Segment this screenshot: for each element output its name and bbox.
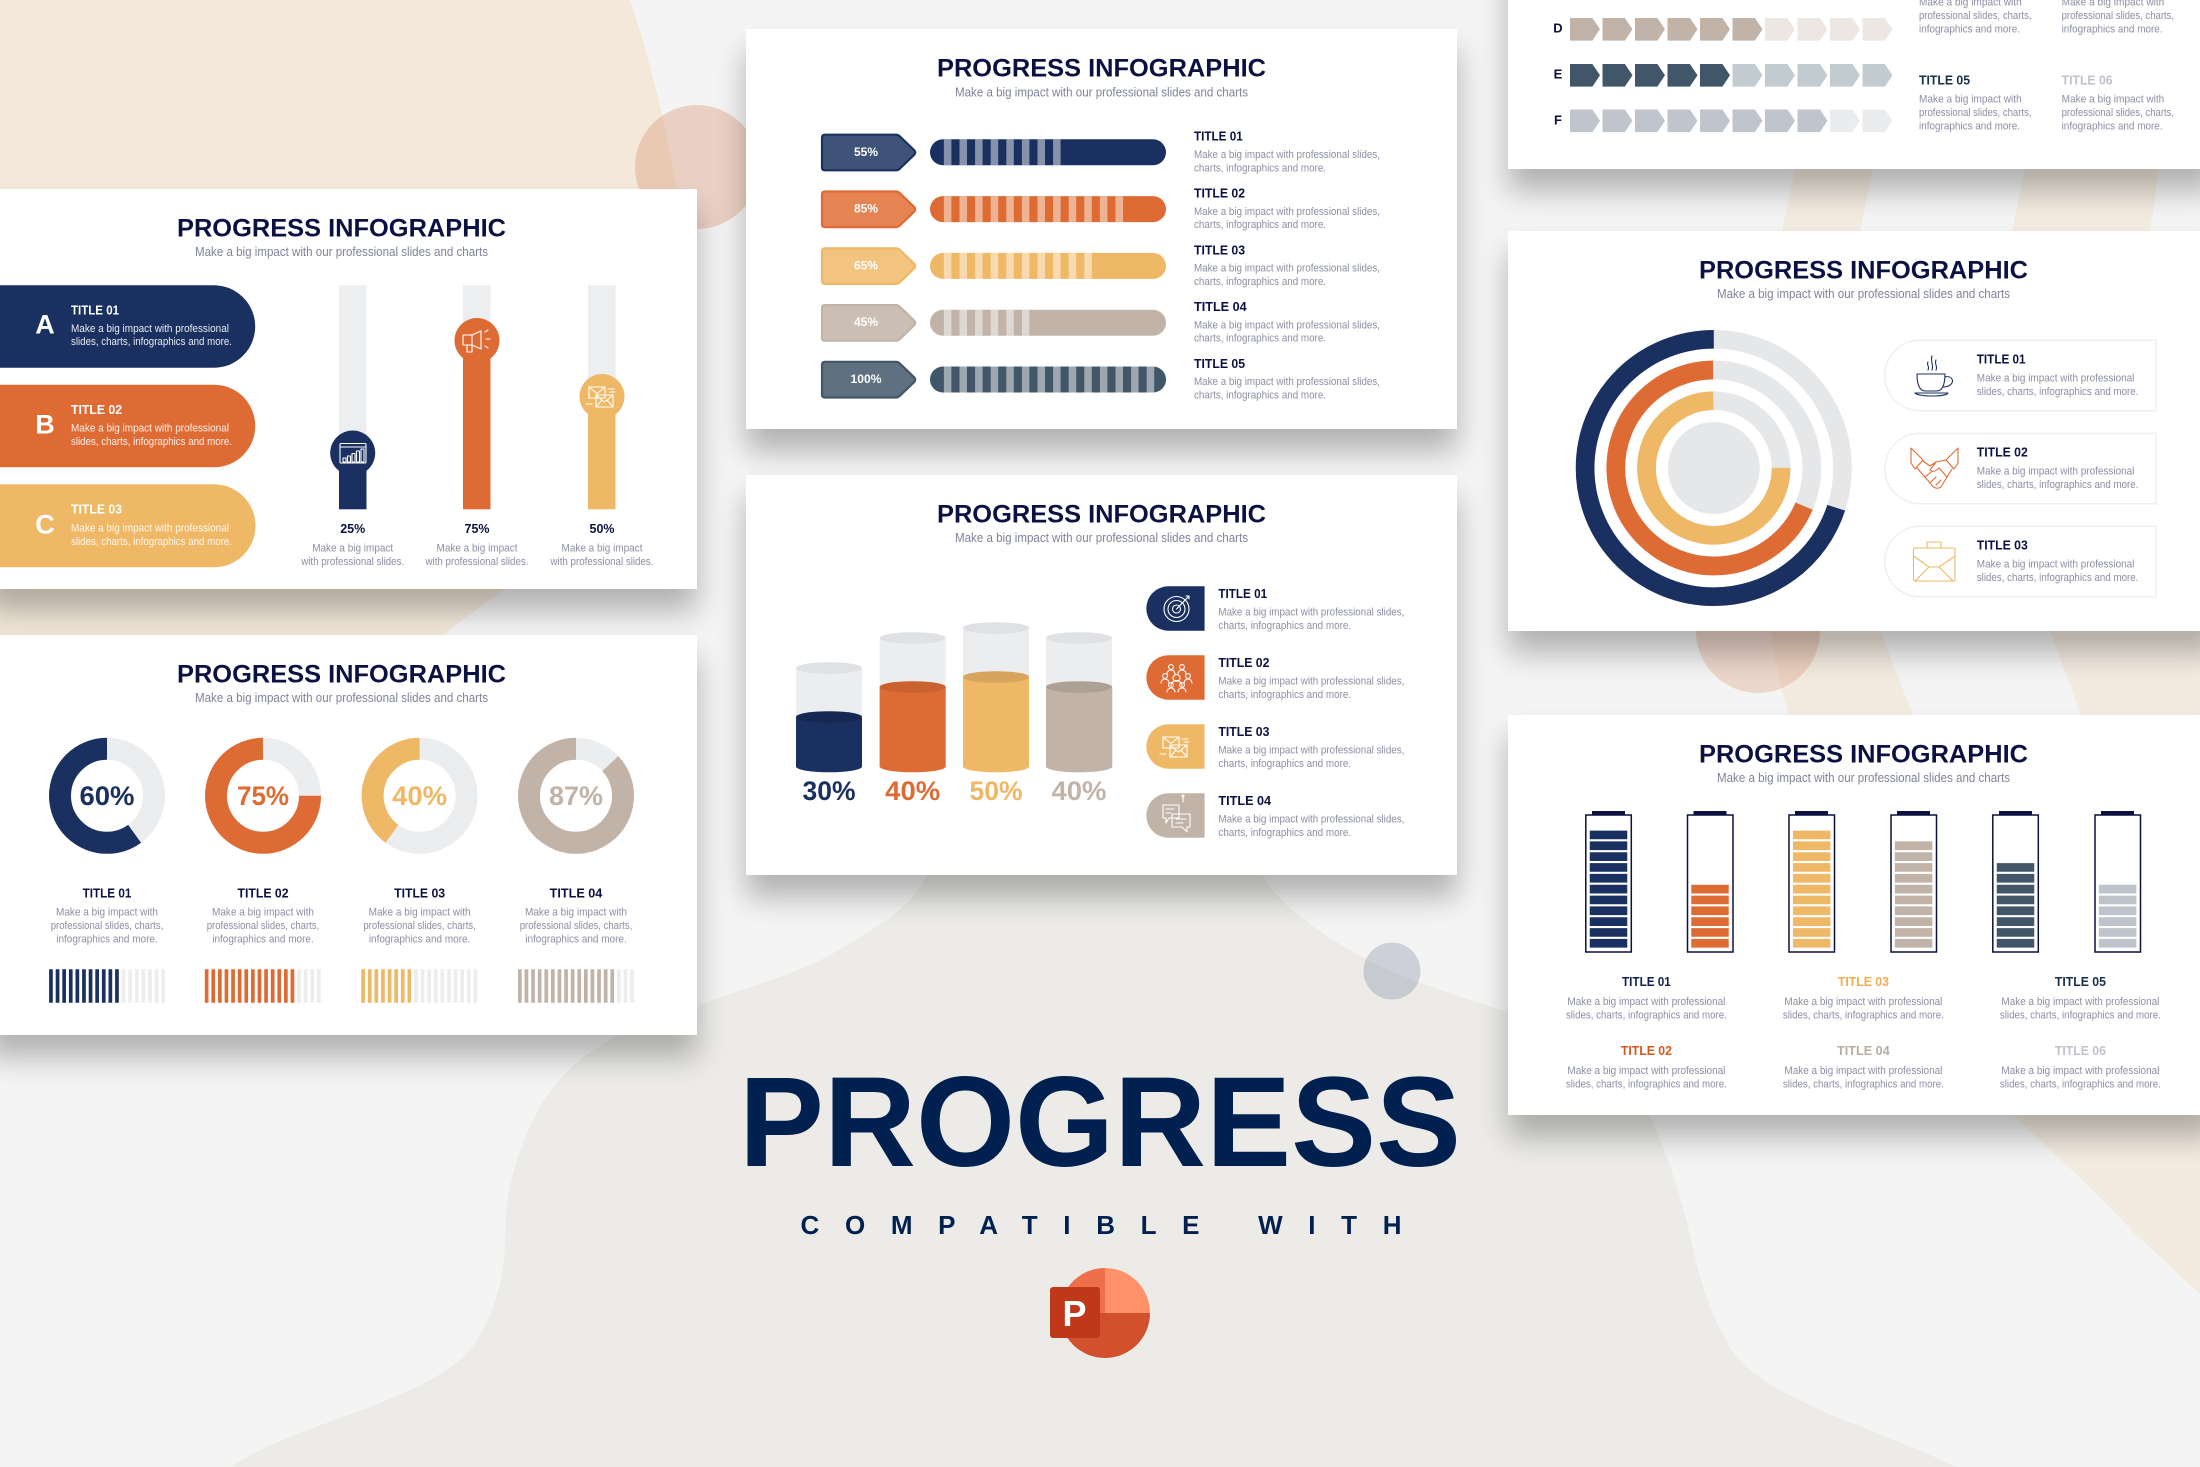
- box: title 02: Make a big impact with professional: [1977, 466, 2134, 478]
- pill A: slides, charts, infographics and more.: [71, 336, 232, 348]
- panel: concentric rings: [1508, 231, 2200, 631]
- subheading: Make a big impact with our professional slides and charts: [195, 244, 488, 259]
- text: title 06: infographics and more.: [2062, 120, 2163, 132]
- donut 40%: 40%: [392, 781, 447, 811]
- text: title 05: TITLE 05: [2055, 975, 2106, 989]
- text: title 02: Make a big impact with professional: [1567, 1065, 1725, 1077]
- pill B: Make a big impact with professional: [71, 423, 229, 435]
- row 65%: Make a big impact with professional slides,: [1194, 263, 1380, 275]
- background: grey corner right: [2150, 130, 2200, 500]
- stripe meter 1: [49, 969, 165, 1003]
- vertical bar 75%: Make a big impact: [436, 543, 518, 555]
- text: title 04: Make a big impact with: [525, 907, 627, 919]
- panel: pills and vertical bars: [0, 189, 697, 589]
- cylinder 30%: 30%: [802, 776, 856, 806]
- stripe meter 3: [361, 969, 477, 1003]
- row 65%: TITLE 03: [1194, 243, 1245, 257]
- row 85%: TITLE 02: [1194, 186, 1245, 200]
- row 55%: [822, 130, 1380, 174]
- donut 60%: 60%: [80, 781, 134, 811]
- text: title 03: infographics and more.: [369, 933, 470, 945]
- row F: [1554, 110, 1892, 132]
- subheading: COMPATIBLE WITH: [800, 1210, 1402, 1240]
- vertical bar 50%: Make a big impact: [562, 543, 642, 555]
- battery 6: [2095, 811, 2140, 952]
- battery 2: [1688, 811, 1733, 952]
- row F: F: [1554, 112, 1562, 128]
- text: title 04: slides, charts, infographics and more.: [1783, 1078, 1944, 1090]
- pill A: A: [35, 310, 55, 340]
- row: title 02 people: charts, infographics and more.: [1218, 689, 1351, 701]
- vertical bar 75%: [425, 285, 528, 568]
- text: title 03: slides, charts, infographics and more.: [1783, 1009, 1944, 1021]
- text: title 02: slides, charts, infographics and more.: [1566, 1078, 1727, 1090]
- subheading: Make a big impact with our professional slides and charts: [195, 690, 488, 705]
- text: title 03: TITLE 03: [394, 886, 445, 900]
- cylinder 40% tan: [1046, 632, 1112, 806]
- text: title 01: [51, 886, 163, 945]
- box: title 01: Make a big impact with professional: [1977, 373, 2134, 385]
- cylinder 40% orange: [880, 632, 946, 806]
- heading: PROGRESS INFOGRAPHIC: [937, 501, 1266, 529]
- text: cropped column 1: professional slides, charts,: [1919, 10, 2032, 22]
- battery 5: [1993, 811, 2038, 952]
- text: title 01: infographics and more.: [56, 933, 158, 945]
- row: title 02 people: Make a big impact with professional slides,: [1218, 676, 1404, 688]
- row: title 04 chat: [1146, 793, 1404, 839]
- row 85%: [822, 186, 1380, 231]
- row: title 03 mail: Make a big impact with professional slides,: [1218, 745, 1404, 757]
- text: title 06: TITLE 06: [2055, 1044, 2106, 1058]
- text: title 05: infographics and more.: [1919, 120, 2020, 132]
- text: title 05: TITLE 05: [1919, 73, 1970, 87]
- text: title 05: Make a big impact with: [1919, 94, 2022, 106]
- subheading: Make a big impact with our professional slides and charts: [1717, 286, 2010, 301]
- row: title 03 mail: TITLE 03: [1218, 725, 1269, 739]
- stripe meter 2: [205, 969, 321, 1003]
- row: title 01 target: [1146, 586, 1404, 632]
- donut 75%: 75%: [237, 781, 289, 811]
- text: title 02: TITLE 02: [238, 886, 289, 900]
- text: title 06: TITLE 06: [2062, 73, 2113, 87]
- text: title 01: Make a big impact with professional: [1567, 996, 1725, 1008]
- text: cropped column 2: professional slides, charts,: [2062, 10, 2174, 22]
- text: cropped column 2: [2062, 0, 2174, 35]
- row 45%: [822, 300, 1380, 345]
- battery 3: [1789, 811, 1834, 952]
- text: title 05: slides, charts, infographics and more.: [2000, 1009, 2161, 1021]
- pill A: TITLE 01: [71, 303, 119, 317]
- background: grey gaps between right bands: [1860, 130, 2120, 1000]
- vertical bar 75%: 75%: [464, 522, 490, 536]
- row 45%: 45%: [854, 315, 878, 329]
- text: title 05: Make a big impact with professional: [2001, 996, 2159, 1008]
- panel: chevron rows (cropped at top): [1508, 0, 2200, 169]
- pill C: [0, 484, 256, 567]
- battery 4: [1891, 811, 1936, 952]
- box: title 03: Make a big impact with professional: [1977, 559, 2134, 571]
- row: title 03 mail: [1146, 724, 1404, 770]
- vertical bar 50%: [550, 285, 654, 568]
- vertical bar 50%: with professional slides.: [550, 556, 654, 568]
- vertical bar 75%: with professional slides.: [425, 556, 528, 568]
- pill B: B: [35, 409, 55, 439]
- subheading: Make a big impact with our professional slides and charts: [955, 84, 1248, 99]
- heading: PROGRESS INFOGRAPHIC: [1699, 257, 2028, 285]
- pill A: [0, 285, 255, 368]
- vertical bar 25%: 25%: [340, 522, 365, 536]
- box: title 03: slides, charts, infographics and more.: [1977, 572, 2138, 584]
- text: title 01: TITLE 01: [83, 886, 131, 900]
- row 85%: 85%: [854, 202, 878, 216]
- icon: PowerPoint logo: P: [1062, 1293, 1087, 1334]
- row 85%: charts, infographics and more.: [1194, 219, 1326, 231]
- row: title 04 chat: charts, infographics and more.: [1218, 827, 1351, 839]
- row 65%: [822, 243, 1380, 288]
- decorative circle top: [635, 105, 759, 229]
- row 100%: charts, infographics and more.: [1194, 390, 1326, 402]
- pill B: TITLE 02: [71, 403, 122, 417]
- donut 60%: [60, 749, 154, 843]
- pill B: slides, charts, infographics and more.: [71, 436, 232, 448]
- text: title 03: [1783, 975, 1944, 1021]
- cylinder 40% orange: 40%: [885, 776, 940, 806]
- vertical bar 25%: [300, 285, 404, 568]
- text: title 06: [2062, 73, 2174, 132]
- text: title 02: [207, 886, 319, 945]
- text: title 03: Make a big impact with professional: [1784, 996, 1942, 1008]
- decorative circle ring card: [1696, 569, 1820, 693]
- pill A: Make a big impact with professional: [71, 323, 229, 335]
- row: title 01 target: TITLE 01: [1218, 587, 1267, 601]
- panel: donut progress: [0, 635, 697, 1035]
- cylinder 50%: 50%: [970, 776, 1022, 806]
- text: title 04: [520, 886, 632, 945]
- text: title 06: Make a big impact with professional: [2001, 1065, 2159, 1077]
- panel: horizontal arrow bars: [746, 29, 1457, 429]
- text: cropped column 1: [1919, 0, 2032, 35]
- stripe meter 4: [518, 969, 634, 1003]
- row 45%: TITLE 04: [1194, 300, 1247, 314]
- background: grey blob: [231, 790, 1957, 1467]
- pill C: Make a big impact with professional: [71, 523, 229, 535]
- vertical bar 25%: with professional slides.: [300, 556, 404, 568]
- text: title 02: infographics and more.: [212, 933, 314, 945]
- vertical bar 25%: Make a big impact: [312, 543, 393, 555]
- text: title 01: Make a big impact with: [56, 907, 158, 919]
- background: beige shape top left: [0, 0, 688, 700]
- text: title 02: [1566, 1044, 1727, 1090]
- concentric ring chart: [1585, 339, 1843, 597]
- row 55%: TITLE 01: [1194, 130, 1243, 144]
- text: title 01: [1566, 975, 1727, 1021]
- text: title 03: professional slides, charts,: [363, 920, 476, 932]
- row 100%: 100%: [850, 372, 882, 386]
- background: beige shape right: [1768, 130, 2200, 1294]
- row 45%: charts, infographics and more.: [1194, 333, 1326, 345]
- box: title 02: TITLE 02: [1977, 445, 2028, 459]
- row: title 04 chat: TITLE 04: [1218, 794, 1271, 808]
- text: title 02: professional slides, charts,: [207, 920, 319, 932]
- text: title 05: professional slides, charts,: [1919, 107, 2032, 119]
- row D: [1553, 18, 1892, 41]
- row D: D: [1553, 21, 1563, 36]
- main heading: PROGRESS: [739, 1051, 1461, 1194]
- row 55%: Make a big impact with professional slides,: [1194, 149, 1380, 161]
- heading: PROGRESS INFOGRAPHIC: [1699, 741, 2028, 769]
- pill C: slides, charts, infographics and more.: [71, 536, 232, 548]
- text: title 06: slides, charts, infographics and more.: [2000, 1078, 2161, 1090]
- row 55%: 55%: [854, 145, 878, 159]
- panel: cylinder progress: [746, 475, 1457, 875]
- battery 1: [1586, 811, 1631, 952]
- row 100%: [822, 357, 1380, 402]
- heading: PROGRESS INFOGRAPHIC: [937, 55, 1266, 83]
- pill C: TITLE 03: [71, 503, 122, 517]
- text: title 01: TITLE 01: [1622, 975, 1671, 989]
- text: title 03: TITLE 03: [1838, 975, 1889, 989]
- text: title 01: slides, charts, infographics and more.: [1566, 1009, 1727, 1021]
- subheading: Make a big impact with our professional slides and charts: [955, 530, 1248, 545]
- row E: [1554, 64, 1892, 87]
- pill C: C: [35, 509, 55, 539]
- pill B: [0, 385, 255, 467]
- text: title 01: professional slides, charts,: [51, 920, 163, 932]
- text: title 03: Make a big impact with: [369, 907, 471, 919]
- text: title 06: Make a big impact with: [2062, 94, 2164, 106]
- panel: battery progress: [1508, 715, 2200, 1115]
- box: title 01: slides, charts, infographics and more.: [1977, 386, 2138, 398]
- text: title 02: TITLE 02: [1621, 1044, 1672, 1058]
- text: cropped column 1: infographics and more.: [1919, 23, 2020, 35]
- text: title 04: TITLE 04: [550, 886, 602, 900]
- box: title 01: [1885, 340, 2156, 411]
- row 65%: 65%: [854, 258, 878, 272]
- box: title 03: [1885, 526, 2156, 597]
- box: title 02: slides, charts, infographics and more.: [1977, 479, 2138, 491]
- row: title 01 target: Make a big impact with professional slides,: [1218, 607, 1404, 619]
- row 100%: Make a big impact with professional slides,: [1194, 376, 1380, 388]
- text: title 06: professional slides, charts,: [2062, 107, 2174, 119]
- cylinder 50%: [963, 622, 1029, 806]
- heading: PROGRESS INFOGRAPHIC: [177, 661, 506, 689]
- text: title 05: [1919, 73, 2032, 132]
- text: title 05: [2000, 975, 2161, 1021]
- row 45%: Make a big impact with professional slides,: [1194, 319, 1380, 331]
- text: title 06: [2000, 1044, 2161, 1090]
- text: title 02: Make a big impact with: [212, 907, 314, 919]
- row 65%: charts, infographics and more.: [1194, 276, 1326, 288]
- donut 75%: [216, 749, 310, 843]
- decorative circle grey: [1364, 942, 1420, 1000]
- row 55%: charts, infographics and more.: [1194, 162, 1326, 174]
- donut 87%: 87%: [549, 781, 603, 811]
- vertical bar 50%: 50%: [590, 522, 614, 536]
- text: title 04: Make a big impact with professional: [1784, 1065, 1942, 1077]
- text: title 04: TITLE 04: [1837, 1044, 1890, 1058]
- cylinder 30%: [796, 662, 862, 806]
- text: title 04: professional slides, charts,: [520, 920, 632, 932]
- icon: PowerPoint logo: [1050, 1268, 1150, 1358]
- donut 40%: [373, 749, 467, 843]
- box: title 03: TITLE 03: [1977, 538, 2028, 552]
- cylinder 40% tan: 40%: [1052, 776, 1106, 806]
- text: cropped column 2: infographics and more.: [2062, 23, 2163, 35]
- row 85%: Make a big impact with professional slides,: [1194, 206, 1380, 218]
- row: title 03 mail: charts, infographics and more.: [1218, 758, 1351, 770]
- box: title 02: [1885, 433, 2156, 504]
- row: title 01 target: charts, infographics and more.: [1218, 620, 1351, 632]
- text: title 04: [1783, 1044, 1944, 1090]
- box: title 01: TITLE 01: [1977, 352, 2026, 366]
- subheading: Make a big impact with our professional slides and charts: [1717, 770, 2010, 785]
- row: title 04 chat: Make a big impact with professional slides,: [1218, 814, 1404, 826]
- text: title 03: [363, 886, 476, 945]
- row: title 02 people: [1146, 655, 1404, 701]
- row E: E: [1554, 67, 1563, 82]
- heading: PROGRESS INFOGRAPHIC: [177, 215, 506, 243]
- text: title 04: infographics and more.: [525, 933, 627, 945]
- donut 87%: [529, 749, 623, 843]
- row: title 02 people: TITLE 02: [1218, 656, 1269, 670]
- row 100%: TITLE 05: [1194, 357, 1245, 371]
